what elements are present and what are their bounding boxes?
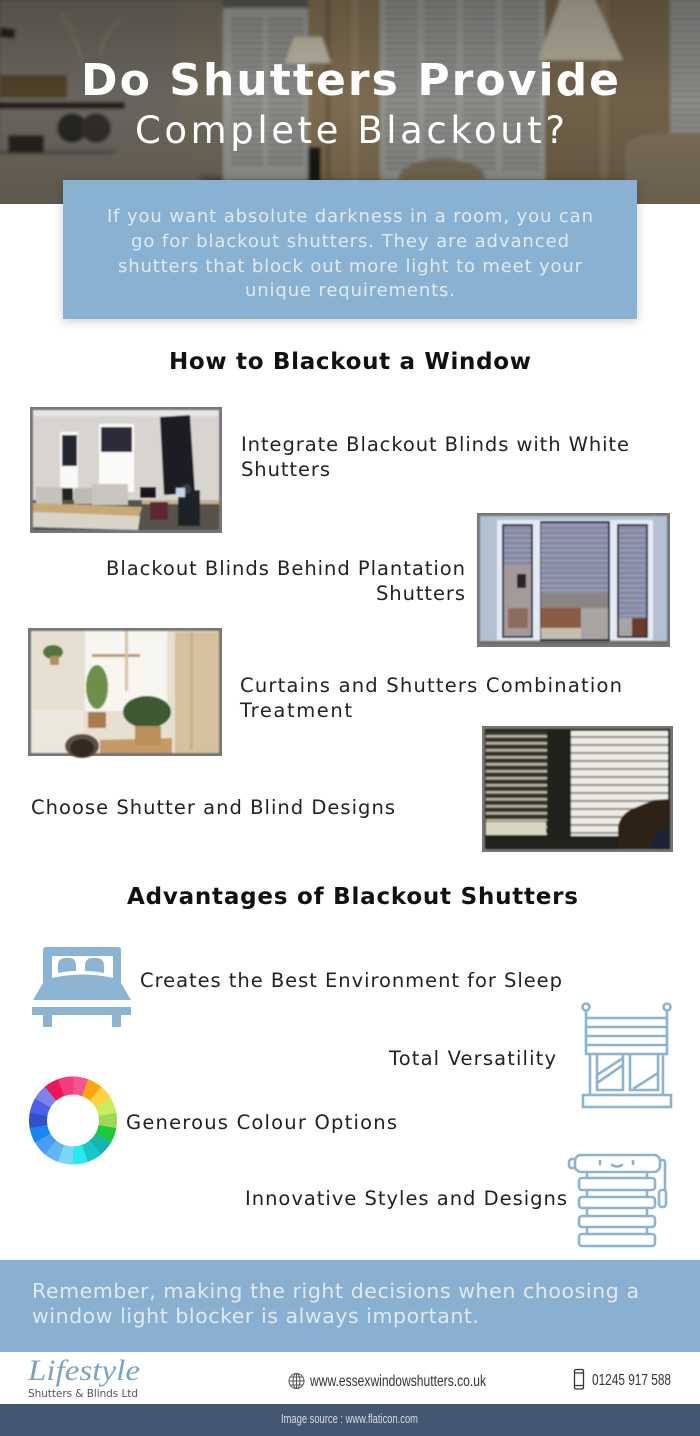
text: blackout blinds behind shutters: Shutters	[376, 582, 465, 605]
intro text: If you want absolute darkness in a room, you can	[107, 206, 593, 227]
text: sleep: Creates the Best Environment for Sleep	[140, 969, 562, 992]
text: colours: Generous Colour Options	[126, 1111, 397, 1134]
intro text: shutters that block out more light to meet your	[118, 256, 583, 277]
panel: closing message	[0, 1260, 700, 1352]
text: curtains and shutters	[239, 674, 622, 722]
source bar	[0, 1404, 700, 1436]
hero photo background	[0, 0, 700, 210]
icon: window blind	[582, 1004, 671, 1107]
phone number: 01245 917 588	[592, 1372, 671, 1389]
intro text	[107, 206, 593, 301]
text: curtains and shutters: Curtains and Shutters Combination	[240, 674, 622, 697]
photo: window with blinds	[477, 513, 670, 647]
title line 2: Complete Blackout?	[135, 109, 565, 152]
text: curtains and shutters: Treatment	[239, 699, 352, 722]
text: integrate blackout blinds: Integrate Blackout Blinds with White	[241, 433, 629, 456]
text: blackout blinds behind shutters: Blackout Blinds Behind Plantation	[106, 557, 465, 580]
website: www.essexwindowshutters.co.uk	[309, 1373, 487, 1390]
photo: classroom with blackout blinds	[30, 407, 222, 533]
text: styles: Innovative Styles and Designs	[245, 1187, 567, 1210]
image source: Image source : www.flaticon.com	[281, 1411, 418, 1426]
icon: bed	[32, 947, 131, 1027]
photo: dark blinds with silhouette	[482, 726, 673, 852]
closing text: Remember, making the right decisions when choosing a	[32, 1279, 639, 1303]
logo: Shutters & Blinds Ltd	[28, 1388, 138, 1400]
heading: advantages: Advantages of Blackout Shutters	[127, 884, 578, 910]
intro text: unique requirements.	[245, 280, 455, 301]
closing text: window light blocker is always important.	[32, 1304, 479, 1328]
text: versatility: Total Versatility	[388, 1047, 556, 1070]
title	[81, 55, 619, 152]
text: integrate blackout blinds: Shutters	[241, 458, 330, 481]
icon: colour wheel	[24, 1071, 122, 1170]
photo: curtains and plants	[28, 628, 222, 758]
text: blackout blinds behind shutters	[106, 557, 465, 605]
icon: globe	[289, 1374, 304, 1388]
heading: how to blackout: How to Blackout a Window	[169, 349, 531, 375]
logo: Lifestyle	[27, 1354, 140, 1387]
logo	[27, 1354, 140, 1400]
text: integrate blackout blinds	[241, 433, 629, 481]
text: choose designs: Choose Shutter and Blind Designs	[31, 796, 395, 819]
closing text	[32, 1279, 639, 1328]
title line 1: Do Shutters Provide	[81, 55, 619, 106]
icon: roller blind	[569, 1155, 666, 1246]
icon: phone	[574, 1370, 584, 1389]
panel: intro	[63, 180, 637, 319]
intro text: go for blackout shutters. They are advanced	[131, 231, 569, 252]
